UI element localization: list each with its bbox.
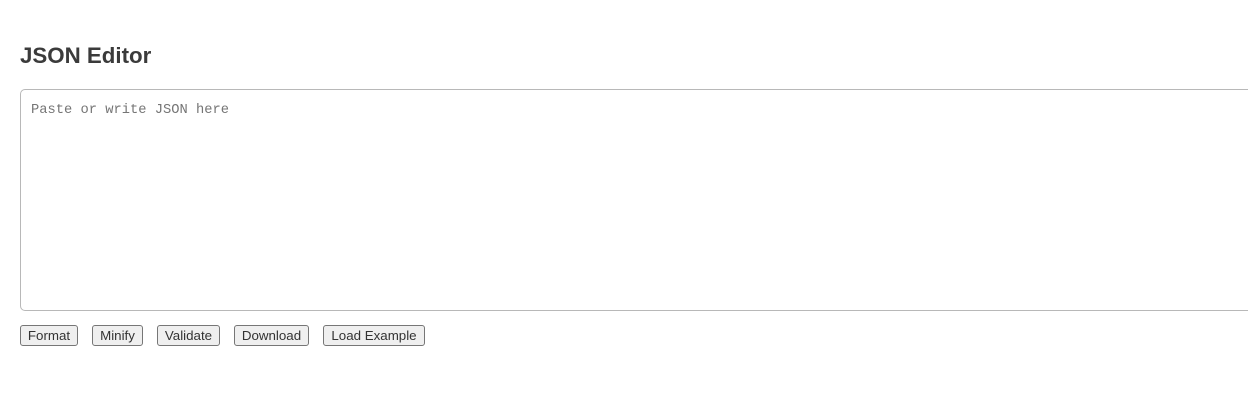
button: Minify	[92, 325, 143, 346]
button: Load Example	[323, 325, 425, 346]
button: Format	[20, 325, 78, 346]
placeholder text: Paste or write JSON here	[31, 103, 229, 118]
button: Validate: Validate	[165, 328, 212, 343]
button: Load Example: Load Example	[331, 328, 417, 343]
button: Format: Format	[28, 328, 70, 343]
button: Download: Download	[242, 328, 301, 343]
title: JSON Editor	[20, 43, 151, 68]
button: Download	[234, 325, 309, 346]
button: Minify: Minify	[100, 328, 135, 343]
button: Validate	[157, 325, 220, 346]
text area panel	[20, 89, 1248, 311]
